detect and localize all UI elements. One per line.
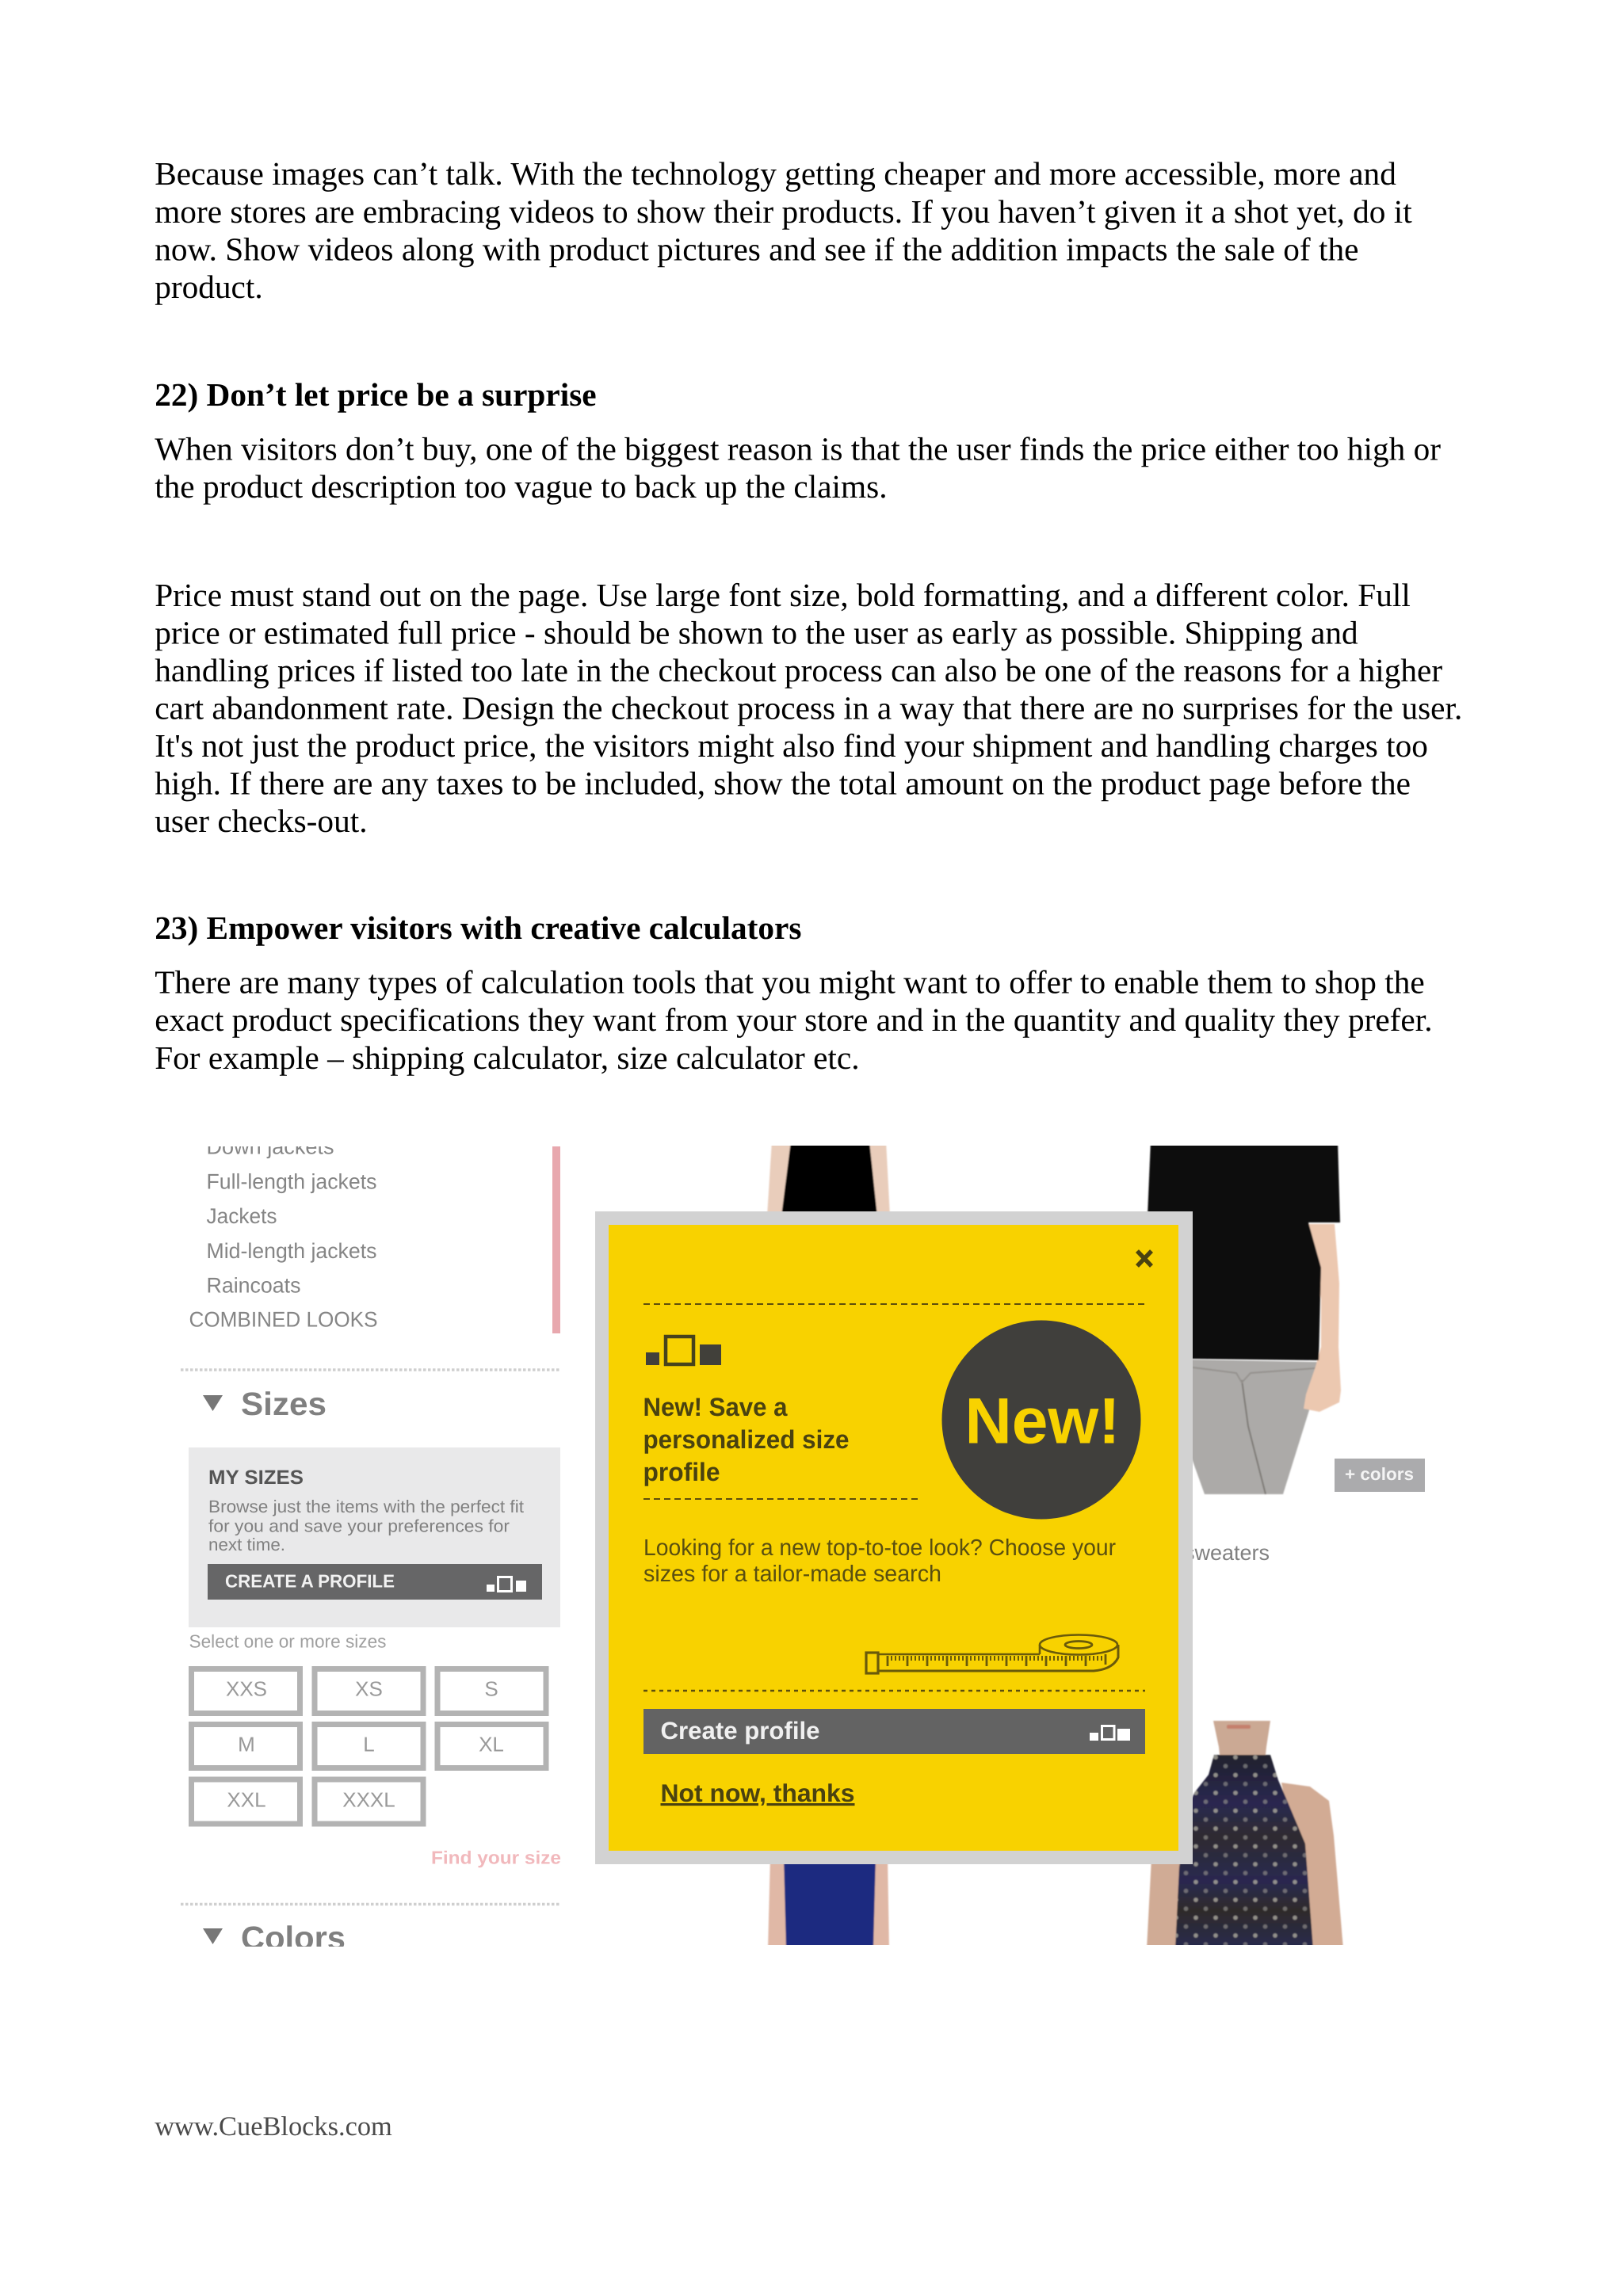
text block: calculators paragraph <box>155 963 1433 1076</box>
text block: calculators paragraph: exact product specifications they want from your store and in the quantity and quality they prefer. <box>155 1001 1433 1038</box>
text: select sizes: Select one or more sizes <box>189 1630 387 1651</box>
button: create a profile: CREATE A PROFILE <box>225 1570 395 1591</box>
heading: 23: 23) Empower visitors with creative calculators <box>155 910 801 946</box>
panel: category list: Down jackets <box>206 1135 334 1158</box>
product: blue dress <box>767 1864 890 1945</box>
panel: category list: Mid-length jackets <box>206 1239 377 1263</box>
text block: price paragraph two: user checks-out. <box>155 803 368 839</box>
text block: calculators paragraph: For example – shipping calculator, size calculator etc. <box>155 1039 860 1076</box>
panel: category list <box>189 1135 377 1331</box>
text block: price paragraph two: cart abandonment rate. Design the checkout process in a way that there are no surprises for the user. <box>155 689 1462 726</box>
text block: price paragraph two: price or estimated full price - should be shown to the user as early as possible. Shipping and <box>155 615 1358 651</box>
size selector grid <box>192 1669 546 1824</box>
label: colors tag <box>1335 1459 1425 1492</box>
text: popup description: Looking for a new top-to-toe look? Choose your <box>643 1535 1116 1561</box>
panel: my sizes: MY SIZES <box>208 1466 304 1489</box>
text: sweaters: sweaters <box>1184 1541 1270 1565</box>
text block: price paragraph one: the product description too vague to back up the claims. <box>155 468 888 505</box>
heading: 22: 22) Don’t let price be a surprise <box>155 376 597 413</box>
panel: my sizes: next time. <box>208 1535 285 1554</box>
link: not now: Not now, thanks <box>661 1779 854 1807</box>
panel: popup <box>595 1211 1193 1864</box>
badge: new: New! <box>965 1385 1121 1458</box>
product: polka dot blouse <box>1147 1721 1343 1949</box>
heading: colors filter <box>203 1925 344 1947</box>
panel: category list: Full-length jackets <box>206 1169 377 1193</box>
heading: colors filter: Colors <box>241 1920 346 1956</box>
size labels: XS <box>355 1676 383 1700</box>
text block: price paragraph two: It's not just the product price, the visitors might also find your shipment and handling charges too <box>155 727 1428 764</box>
scrollbar <box>552 1146 560 1333</box>
size labels: XXS <box>226 1676 267 1700</box>
heading: sizes filter: Sizes <box>241 1386 327 1422</box>
icon: measuring tape <box>866 1635 1118 1673</box>
button: create a profile <box>208 1564 542 1600</box>
text: popup description <box>643 1535 1116 1587</box>
icon: close <box>1137 1251 1151 1266</box>
label: colors tag: + colors <box>1345 1464 1414 1484</box>
heading: save a profile: New! Save a <box>643 1393 788 1421</box>
panel: my sizes <box>189 1447 560 1627</box>
product: black top and grey jeans <box>1148 1141 1341 1494</box>
footer: www.CueBlocks.com <box>155 2111 392 2142</box>
text block: calculators paragraph: There are many types of calculation tools that you might want to offer to enable them to shop the <box>155 963 1425 1000</box>
text block: intro paragraph: Because images can’t talk. With the technology getting cheaper and more accessible, more and <box>155 155 1396 192</box>
heading: save a profile: personalized size <box>643 1425 850 1454</box>
size labels: L <box>363 1732 375 1756</box>
panel: category list: Jackets <box>206 1204 277 1228</box>
size labels: M <box>238 1732 255 1756</box>
text block: intro paragraph: more stores are embracing videos to show their products. If you haven’t given it a shot yet, do it <box>155 193 1412 230</box>
size labels: XXL <box>227 1787 266 1811</box>
link: find your size: Find your size <box>431 1848 561 1868</box>
button: create profile: Create profile <box>661 1717 819 1745</box>
heading: save a profile: profile <box>643 1458 720 1486</box>
text block: price paragraph two: Price must stand out on the page. Use large font size, bold formatting, and a different color. Full <box>155 577 1411 613</box>
text block: price paragraph two: handling prices if listed too late in the checkout process can also be one of the reasons for a higher <box>155 652 1442 688</box>
text: popup description: sizes for a tailor-made search <box>643 1562 941 1587</box>
badge: new <box>941 1320 1141 1520</box>
heading: save a profile <box>643 1393 850 1486</box>
text block: price paragraph one <box>155 431 1441 505</box>
text block: price paragraph two <box>155 577 1462 839</box>
button: create profile <box>643 1709 1145 1754</box>
panel: category list: COMBINED LOOKS <box>189 1307 377 1331</box>
heading: sizes filter <box>203 1391 325 1415</box>
text block: price paragraph one: When visitors don’t buy, one of the biggest reason is that the user finds the price either too high or <box>155 431 1441 467</box>
text block: intro paragraph: now. Show videos along with product pictures and see if the addition impacts the sale of the <box>155 231 1358 268</box>
panel: product photos <box>767 1141 1343 1949</box>
size labels: S <box>484 1676 498 1700</box>
text block: price paragraph two: high. If there are any taxes to be included, show the total amount on the product page before the <box>155 765 1411 802</box>
size labels: XXXL <box>342 1787 395 1811</box>
text block: intro paragraph <box>155 155 1412 305</box>
panel: category list: Raincoats <box>206 1274 301 1298</box>
size labels <box>226 1676 504 1811</box>
panel: my sizes: for you and save your preferences for <box>208 1516 510 1535</box>
icon: size squares <box>646 1337 721 1365</box>
panel: my sizes: Browse just the items with the perfect fit <box>208 1497 524 1516</box>
product: black dress <box>767 1146 891 1211</box>
panel: store screenshot <box>181 1135 561 1956</box>
size labels: XL <box>479 1732 504 1756</box>
text block: intro paragraph: product. <box>155 269 263 305</box>
